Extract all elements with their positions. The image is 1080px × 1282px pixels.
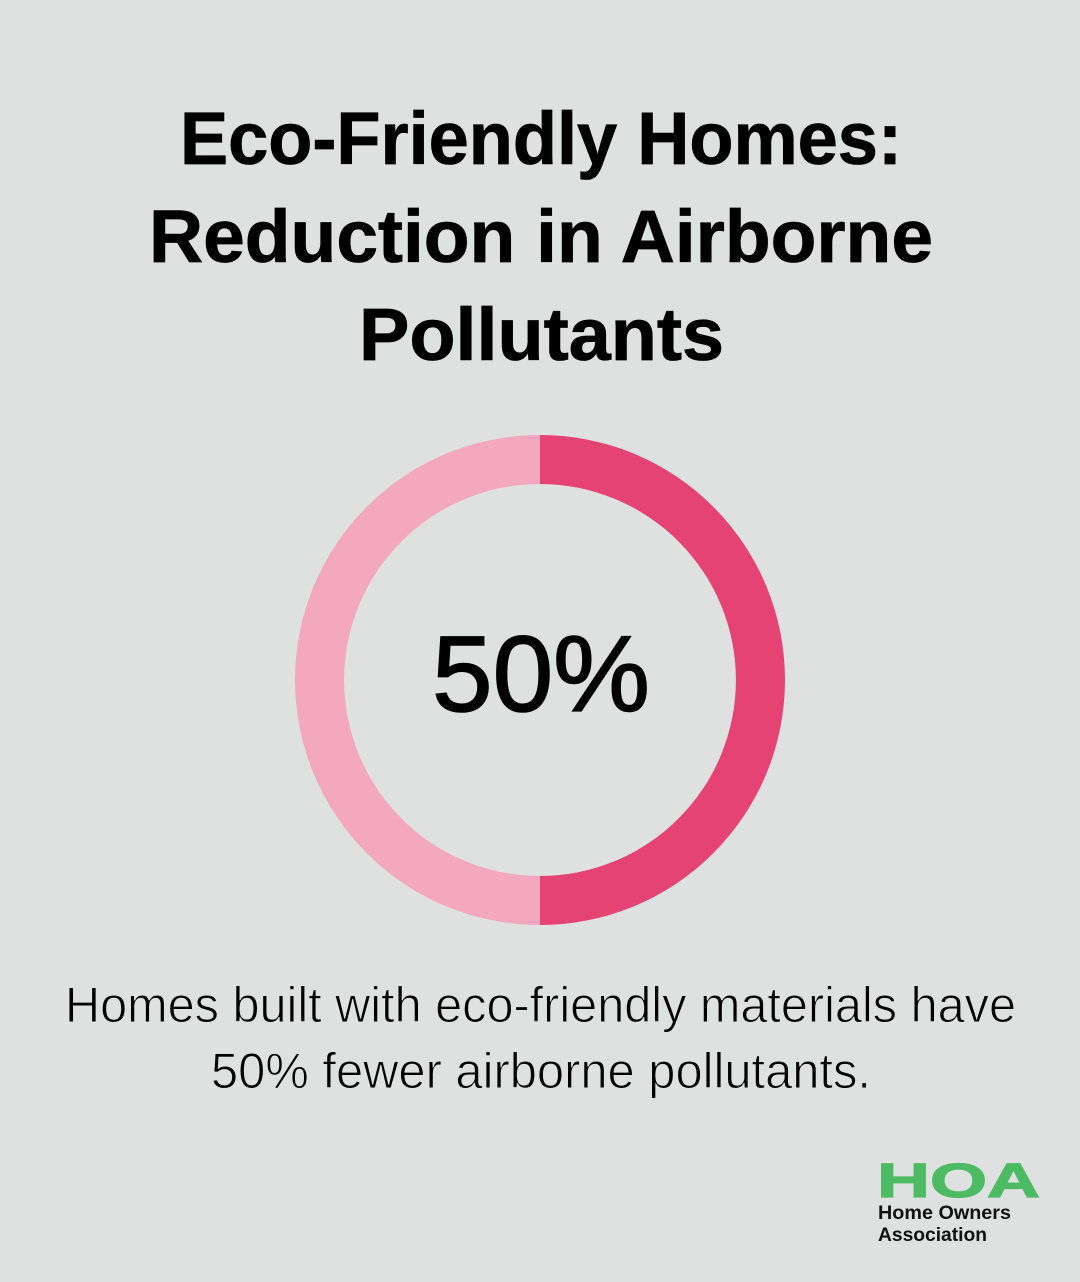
- logo: Home Owners Association: Association: [878, 1225, 987, 1246]
- remaining segment: [295, 435, 540, 925]
- title: [149, 97, 933, 376]
- donut value: 50%: [432, 613, 650, 734]
- logo name: Home Owners: [878, 1203, 1011, 1224]
- title: Reduction in Airborne: [149, 195, 933, 278]
- donut chart: 50%: [295, 435, 785, 925]
- title: Pollutants: [359, 293, 724, 376]
- description text: 50% fewer airborne pollutants.: [211, 1043, 871, 1099]
- highlighted segment: [540, 435, 785, 925]
- logo mark: HOA: [877, 1155, 1040, 1208]
- description text: Homes built with eco-friendly materials have: [65, 977, 1016, 1033]
- title: Eco-Friendly Homes:: [180, 97, 902, 180]
- description text: [65, 977, 1016, 1099]
- logo: Home Owners Association: [877, 1155, 1040, 1246]
